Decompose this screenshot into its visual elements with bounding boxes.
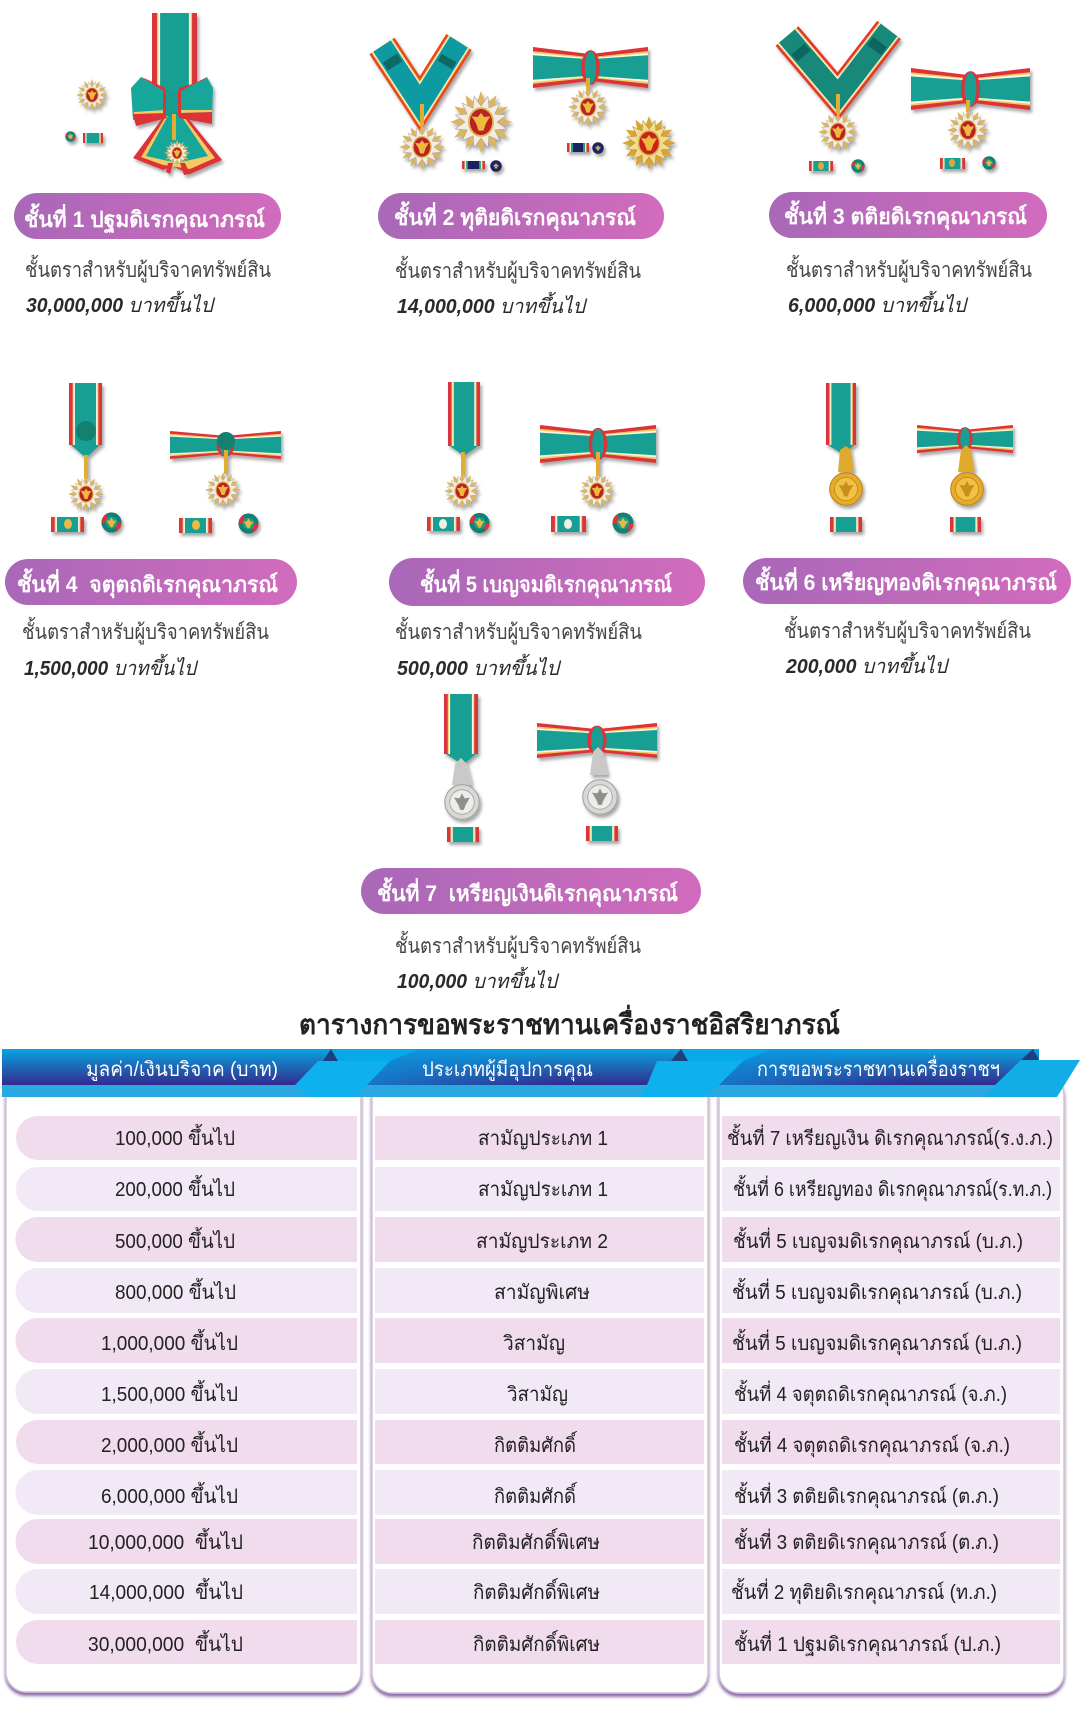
panel: table column 1 body xyxy=(6,1075,361,1692)
table column 3 rows: ชั้นที่ 4 จตุตถดิเรกคุณาภรณ์ (จ.ภ.) xyxy=(734,1380,1007,1407)
icon: class 2 medals xyxy=(382,42,677,172)
title: ตารางการขอพระราชทานเครื่องราชอิสริยาภรณ์ xyxy=(299,1004,840,1040)
table column 1 rows: 200,000 ขึ้นไป xyxy=(115,1175,235,1201)
pill: class 5 title xyxy=(389,558,705,606)
table column 3 rows: ชั้นที่ 2 ทุติยดิเรกคุณาภรณ์ (ท.ภ.) xyxy=(731,1578,997,1605)
text: class 2 amount: 14,000,000 บาทขึ้นไป xyxy=(397,291,588,318)
table column 1 rows: 100,000 ขึ้นไป xyxy=(115,1124,235,1150)
table column 2 rows: กิตติมศักดิ์พิเศษ xyxy=(473,1577,600,1604)
icon: class 5 medals xyxy=(427,382,656,534)
panel: class 4 xyxy=(5,383,297,680)
table column 1 rows: 10,000,000 ขึ้นไป xyxy=(88,1528,243,1554)
text: class 6 amount: 200,000 บาทขึ้นไป xyxy=(785,651,950,678)
table column 2 rows: กิตติมศักดิ์ xyxy=(494,1430,578,1457)
table column 2 rows: วิสามัญ xyxy=(507,1384,568,1406)
table column 3 rows: ชั้นที่ 5 เบญจมดิเรกคุณาภรณ์ (บ.ภ.) xyxy=(733,1227,1023,1254)
panel: class 2 xyxy=(378,42,677,318)
text: class 2 description: ชั้นตราสำหรับผู้บริจาคทรัพย์สิน xyxy=(395,256,641,284)
text: class 1 amount: 30,000,000 บาทขึ้นไป xyxy=(26,290,216,317)
pill: class 5 title: ชั้นที่ 5 เบญจมดิเรกคุณาภรณ์ xyxy=(420,568,672,599)
table column 2 rows: วิสามัญ xyxy=(503,1333,565,1355)
table column 3 rows xyxy=(722,1116,1060,1664)
panel: table column 2 body xyxy=(372,1075,708,1693)
text: class 3 description: ชั้นตราสำหรับผู้บริจาคทรัพย์สิน xyxy=(786,255,1032,283)
header: benefactor type: ประเภทผู้มีอุปการคุณ xyxy=(422,1059,593,1082)
table column 3 rows: ชั้นที่ 1 ปฐมดิเรกคุณาภรณ์ (ป.ภ.) xyxy=(734,1630,1001,1657)
icon: class 6 medals xyxy=(826,383,1013,532)
pill: class 3 title xyxy=(769,192,1047,238)
table column 2 rows: สามัญประเภท 1 xyxy=(478,1179,608,1201)
header: donation value: มูลค่า/เงินบริจาค (บาท) xyxy=(86,1059,278,1082)
pill: class 2 title: ชั้นที่ 2 ทุติยดิเรกคุณาภรณ์ xyxy=(394,201,636,232)
table column 2 rows: สามัญประเภท 1 xyxy=(478,1128,608,1150)
pill: class 6 title: ชั้นที่ 6 เหรียญทองดิเรกคุณาภรณ์ xyxy=(755,566,1057,597)
panel: class 6 xyxy=(743,383,1071,678)
header: decoration request: การขอพระราชทานเครื่องราชฯ xyxy=(757,1055,1000,1081)
text: class 7 amount: 100,000 บาทขึ้นไป xyxy=(397,966,560,993)
table column 2 rows: กิตติมศักดิ์พิเศษ xyxy=(473,1629,600,1656)
text: class 7 description: ชั้นตราสำหรับผู้บริจาคทรัพย์สิน xyxy=(395,931,641,959)
text: class 6 description: ชั้นตราสำหรับผู้บริจาคทรัพย์สิน xyxy=(784,616,1031,644)
table column 2 rows: กิตติมศักดิ์ xyxy=(494,1481,578,1508)
pill: class 4 title xyxy=(5,559,297,605)
panel: class 7 xyxy=(361,694,701,993)
pill: class 6 title xyxy=(743,558,1071,604)
table column 2 rows: สามัญประเภท 2 xyxy=(476,1231,608,1253)
table column 1 rows: 30,000,000 ขึ้นไป xyxy=(88,1630,243,1656)
text: class 3 amount: 6,000,000 บาทขึ้นไป xyxy=(788,290,969,317)
table column 3 rows: ชั้นที่ 5 เบญจมดิเรกคุณาภรณ์ (บ.ภ.) xyxy=(732,1329,1022,1356)
table column 2 rows xyxy=(375,1116,704,1664)
table column 3 rows: ชั้นที่ 3 ตติยดิเรกคุณาภรณ์ (ต.ภ.) xyxy=(734,1528,999,1555)
table column 1 rows: 500,000 ขึ้นไป xyxy=(115,1227,235,1253)
table column 3 rows: ชั้นที่ 3 ตติยดิเรกคุณาภรณ์ (ต.ภ.) xyxy=(734,1482,999,1509)
table column 3 rows: ชั้นที่ 4 จตุตถดิเรกคุณาภรณ์ (จ.ภ.) xyxy=(734,1431,1010,1458)
table column 2 rows: สามัญพิเศษ xyxy=(494,1282,590,1304)
icon: class 4 medals xyxy=(51,383,281,534)
pill: class 1 title xyxy=(14,193,281,239)
icon: class 3 medals xyxy=(787,30,1030,173)
text: class 4 amount: 1,500,000 บาทขึ้นไป xyxy=(24,653,199,680)
pill: class 7 title xyxy=(361,868,701,914)
text: class 1 description: ชั้นตราสำหรับผู้บริจาคทรัพย์สิน xyxy=(25,255,271,283)
icon: class 7 medals xyxy=(444,694,657,842)
panel: class 1 xyxy=(14,13,281,317)
table header banner xyxy=(2,1049,1080,1097)
pill: class 7 title: ชั้นที่ 7 เหรียญเงินดิเรกคุณาภรณ์ xyxy=(377,877,678,908)
panel: class 5 xyxy=(389,382,705,680)
table column 2 rows: กิตติมศักดิ์พิเศษ xyxy=(472,1527,600,1554)
table column 3 rows: ชั้นที่ 5 เบญจมดิเรกคุณาภรณ์ (บ.ภ.) xyxy=(732,1278,1022,1305)
text: class 4 description: ชั้นตราสำหรับผู้บริจาคทรัพย์สิน xyxy=(22,617,269,645)
text: class 5 description: ชั้นตราสำหรับผู้บริจาคทรัพย์สิน xyxy=(395,617,642,645)
icon: class 1 medals xyxy=(65,13,222,175)
text: class 5 amount: 500,000 บาทขึ้นไป xyxy=(397,653,562,680)
table column 1 rows: 2,000,000 ขึ้นไป xyxy=(101,1431,238,1457)
table column 3 rows: ชั้นที่ 7 เหรียญเงิน ดิเรกคุณาภรณ์(ร.ง.ภ.) xyxy=(727,1124,1053,1151)
pill: class 1 title: ชั้นที่ 1 ปฐมดิเรกคุณาภรณ์ xyxy=(24,203,265,234)
panel: table column 3 body xyxy=(719,1075,1064,1693)
table column 1 rows: 14,000,000 ขึ้นไป xyxy=(89,1578,243,1604)
panel: class 3 xyxy=(769,30,1047,317)
table column 1 rows: 6,000,000 ขึ้นไป xyxy=(101,1482,238,1508)
pill: class 3 title: ชั้นที่ 3 ตติยดิเรกคุณาภรณ์ xyxy=(784,200,1027,231)
pill: class 4 title: ชั้นที่ 4 จตุตถดิเรกคุณาภรณ์ xyxy=(17,568,278,599)
table column 1 rows: 1,500,000 ขึ้นไป xyxy=(101,1380,238,1406)
pill: class 2 title xyxy=(378,193,664,239)
table column 1 rows xyxy=(16,1116,357,1664)
table column 1 rows: 800,000 ขึ้นไป xyxy=(115,1278,236,1304)
table column 1 rows: 1,000,000 ขึ้นไป xyxy=(101,1329,238,1355)
